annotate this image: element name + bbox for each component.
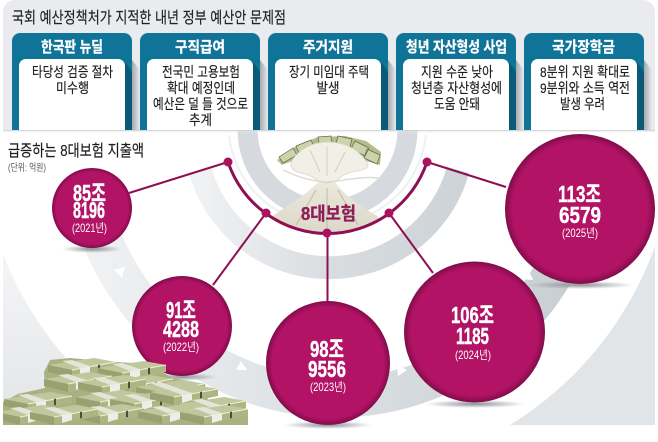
card: 청년 자산형성 사업: 청년층 자산형성에 (411, 80, 502, 96)
bubble: 2021: (2021년) (72, 221, 107, 235)
card: 국가장학금: 발생 우려 (560, 96, 605, 112)
bubble: 2024: (2024년) (455, 348, 491, 362)
card: 구직급여 (140, 33, 268, 130)
panel: budget problems (3, 0, 655, 130)
bubble: 2025 (505, 134, 655, 289)
unit note: (단위: 억원) (8, 161, 46, 174)
panel title: 국회 예산정책처가 지적한 내년 정부 예산안 문제점 (12, 9, 286, 27)
card: 구직급여: 전국민 고용보험 (162, 64, 240, 80)
card: 주거지원 (268, 33, 396, 130)
icon: pile of money (0, 358, 248, 425)
card: 구직급여: 확대 예정인데 (167, 80, 235, 96)
bag label: 8대보험 (301, 204, 356, 224)
card: 청년 자산형성 사업 (396, 33, 524, 130)
bubble: 2022: 4288 (163, 316, 199, 342)
card: 주거지원: 주거지원 (303, 39, 353, 56)
bubble: 2023: 9556 (308, 356, 346, 382)
bubble: 2024: 106조 (451, 302, 494, 328)
bubble: 2022 (132, 276, 232, 381)
bubble: 2021: 8196 (73, 197, 105, 223)
card: 국가장학금: 9분위와 소득 역전 (540, 80, 630, 96)
bubble: 2022: 91조 (166, 297, 196, 323)
bubble: 2025: 113조 (558, 181, 601, 207)
card: 한국판 뉴딜: 한국판 뉴딜 (41, 39, 103, 56)
card: 국가장학금: 국가장학금 (552, 39, 615, 56)
card: 한국판 뉴딜 (12, 33, 140, 130)
bubble: 2024: 1185 (456, 323, 489, 349)
bubble: 2022: (2022년) (163, 340, 199, 354)
bubble: 2025: 6579 (559, 202, 601, 228)
card: 구직급여: 예산은 덜 들 것으로 (153, 96, 248, 112)
card: 주거지원: 발생 (316, 80, 340, 96)
card: 청년 자산형성 사업: 도움 안돼 (434, 96, 480, 112)
card: 국가장학금 (524, 33, 652, 130)
icon: money bag (272, 136, 381, 232)
bubble: 2021: 85조 (73, 180, 106, 206)
card: 한국판 뉴딜: 타당성 검증 절차 (32, 64, 113, 80)
bubble: 2023: (2023년) (310, 380, 346, 394)
decorative rings and flow band (92, 130, 580, 398)
bubble: 2023: 98조 (310, 336, 344, 362)
section heading: 급증하는 8대보험 지출액 (8, 142, 144, 160)
card: 청년 자산형성 사업: 청년 자산형성 사업 (406, 39, 507, 56)
card: 국가장학금: 8분위 지원 확대로 (540, 64, 630, 80)
card: 구직급여: 구직급여 (175, 39, 225, 56)
bubble: 2023 (266, 301, 390, 429)
card: 청년 자산형성 사업: 지원 수준 낮아 (421, 64, 493, 80)
bubble: 2024 (404, 262, 545, 408)
background corner wedges (3, 246, 655, 425)
card: 구직급여: 추계 (189, 112, 212, 128)
connector arc and lines (129, 158, 506, 302)
bubble: 2021 (52, 168, 132, 253)
card: 한국판 뉴딜: 미수행 (56, 80, 89, 96)
bubble: 2025: (2025년) (562, 226, 598, 240)
card: 주거지원: 장기 미임대 주택 (289, 64, 369, 80)
